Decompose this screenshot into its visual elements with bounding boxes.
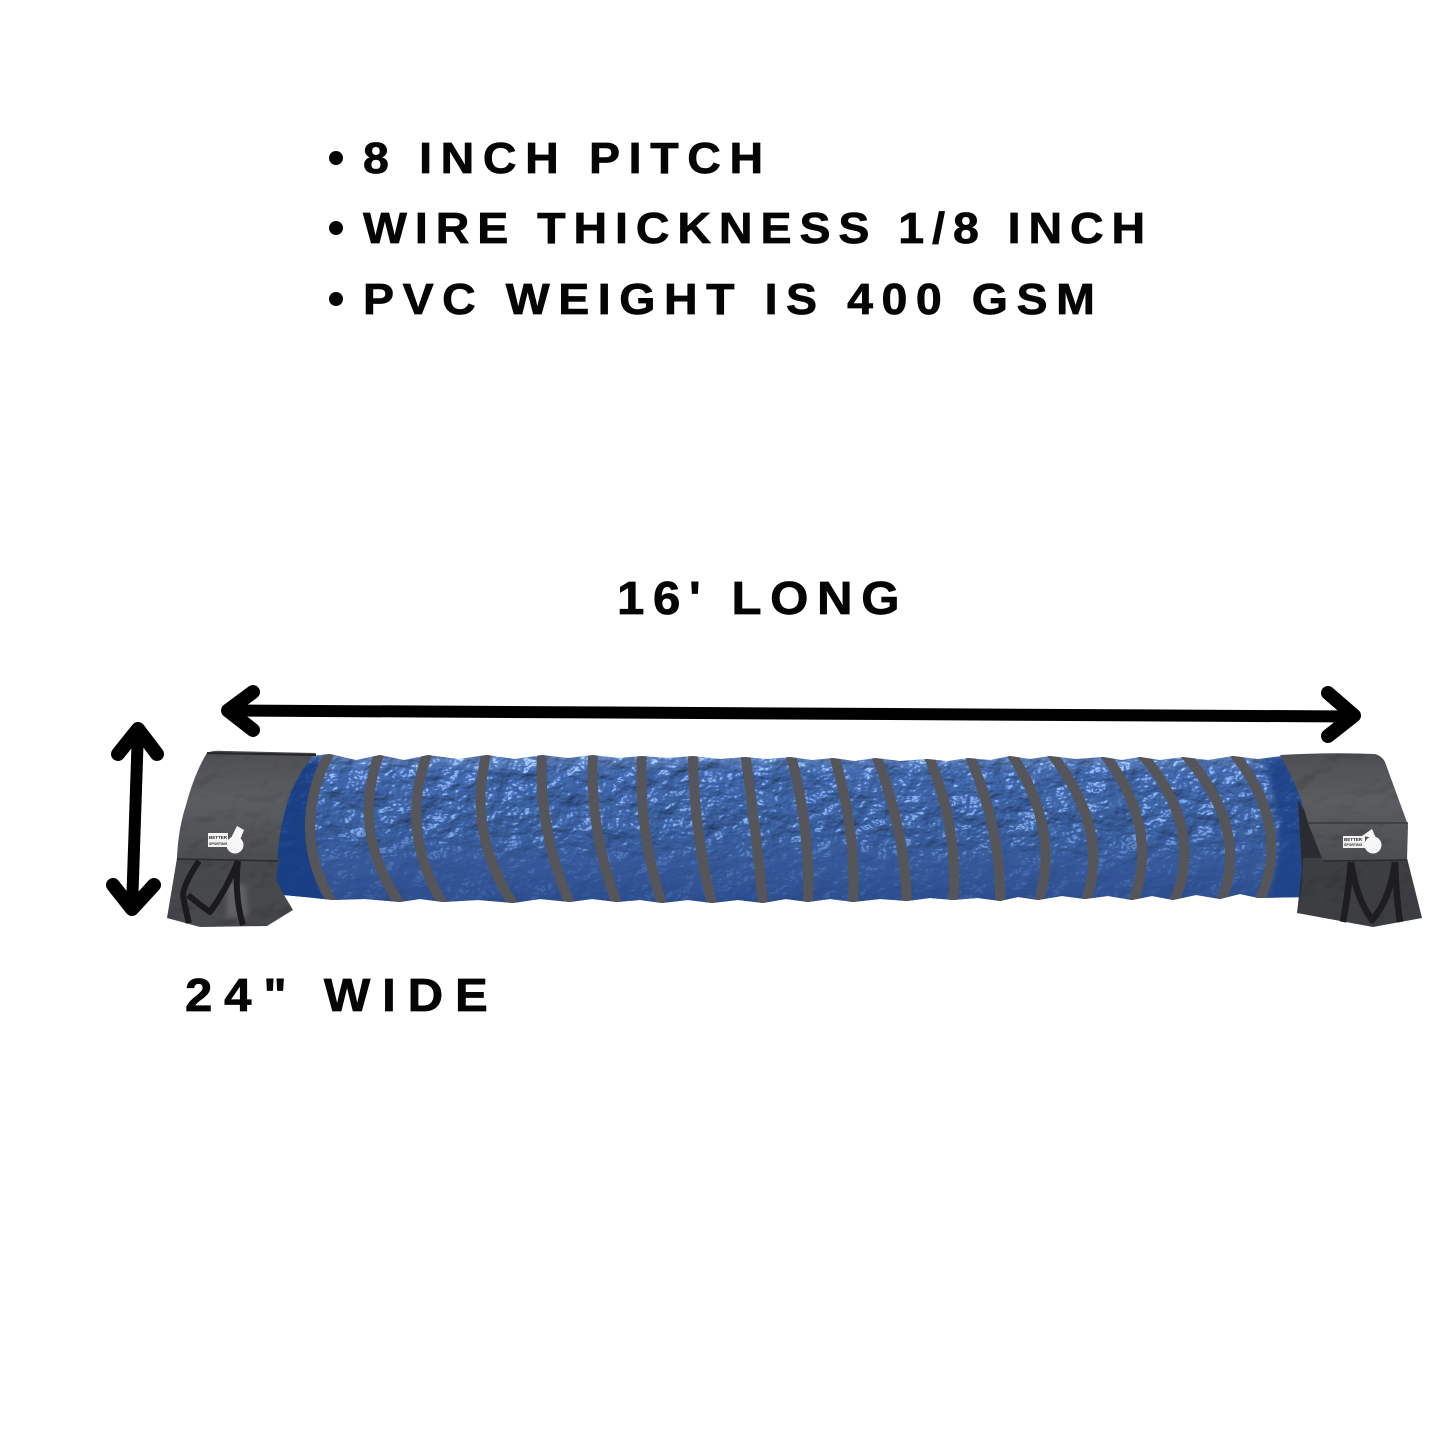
left bag logo: BETTER xyxy=(209,835,228,840)
spec: wire thickness: WIRE THICKNESS 1/8 INCH xyxy=(363,203,1145,253)
left bag handles xyxy=(183,861,243,925)
left bag logo xyxy=(208,826,244,854)
spec: pitch: 8 INCH PITCH xyxy=(363,133,763,183)
length label: 16' LONG xyxy=(617,573,899,625)
specification list xyxy=(329,133,1145,324)
right end bag xyxy=(1280,753,1422,927)
infographic canvas xyxy=(106,142,1422,1012)
tunnel wire rings xyxy=(310,752,1271,904)
arrow: width xyxy=(113,729,157,909)
right bag logo xyxy=(1343,829,1382,854)
left end bag xyxy=(167,751,316,927)
tunnel illustration xyxy=(167,750,1422,927)
right bag handles xyxy=(1343,862,1400,922)
arrow: length xyxy=(228,692,1354,736)
tunnel fabric body xyxy=(260,750,1335,908)
right bag logo: SPORTING xyxy=(1344,843,1363,847)
right bag logo: BETTER xyxy=(1344,837,1363,842)
left bag logo: SPORTING xyxy=(209,842,228,846)
width label: 24" WIDE xyxy=(185,970,488,1022)
spec: PVC weight: PVC WEIGHT IS 400 GSM xyxy=(363,274,1095,324)
